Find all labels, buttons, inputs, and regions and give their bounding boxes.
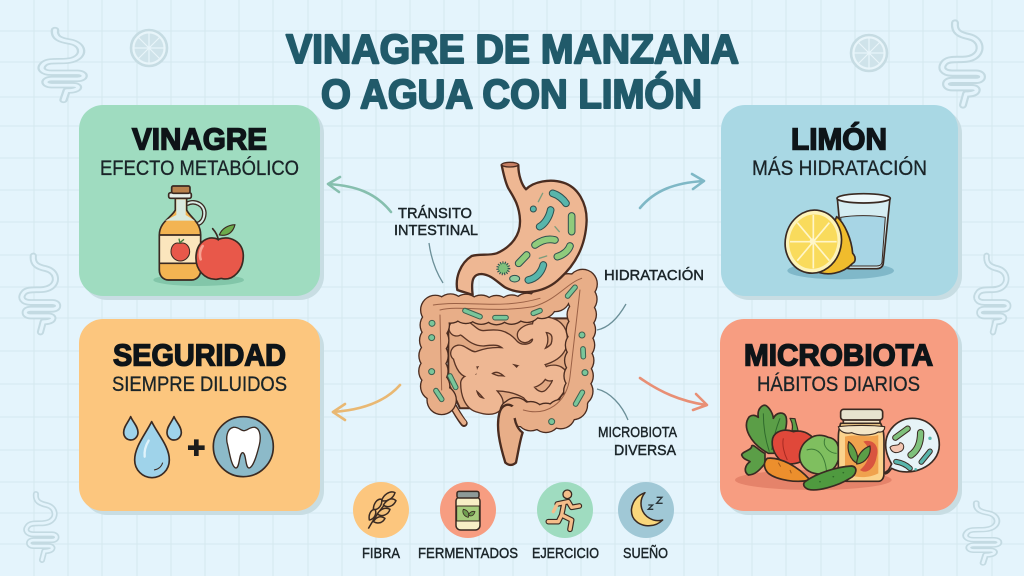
heading: microbiota: MICROBIOTA	[744, 338, 933, 372]
label: microbiota diversa	[598, 424, 677, 459]
background icon: gut left	[22, 256, 58, 332]
icon: jar	[456, 491, 480, 530]
small intestine	[448, 318, 570, 408]
subheading: efecto metabólico: EFECTO METABÓLICO	[100, 157, 299, 180]
background icon: gut bottom left	[26, 494, 56, 560]
habit: fibra	[353, 482, 409, 538]
background icon: gut bottom right	[966, 503, 999, 563]
background icon: gut top right	[942, 23, 982, 105]
arrow: to seguridad	[333, 385, 400, 420]
colon bacteria	[429, 287, 588, 425]
habit: fermentados	[440, 482, 496, 538]
background icon: lemon top right	[851, 35, 887, 71]
habit: sueño	[618, 482, 674, 538]
label: ejercicio: EJERCICIO	[532, 545, 599, 562]
icon: runner	[548, 490, 579, 529]
panel: vinagre	[79, 105, 324, 300]
leader lines	[429, 243, 628, 420]
subheading: más hidratación: MÁS HIDRATACIÓN	[752, 157, 927, 180]
panel: microbiota	[720, 319, 962, 515]
habit: ejercicio	[537, 482, 593, 538]
panel: seguridad	[79, 319, 324, 515]
heading: seguridad: SEGURIDAD	[113, 338, 286, 372]
icon: vinegar bottle and apple	[153, 186, 244, 286]
icon: lemon and glass of water	[779, 194, 894, 279]
subheading: siempre diluidos: SIEMPRE DILUIDOS	[112, 373, 287, 396]
arrow: to microbiota	[640, 378, 707, 410]
heading: limón: LIMÓN	[791, 120, 887, 156]
icon: water drops plus tooth	[124, 417, 273, 478]
title: O AGUA CON LIMÓN	[321, 71, 702, 117]
icon: wheat	[368, 492, 396, 529]
heading: vinagre: VINAGRE	[132, 122, 267, 156]
label: sueño: SUEÑO	[623, 545, 668, 562]
illustration: digestive system	[429, 162, 588, 465]
background icon: lemon top left	[131, 30, 167, 66]
title: VINAGRE DE MANZANA	[286, 26, 739, 72]
arrow: to vinagre	[328, 177, 391, 212]
large intestine	[433, 278, 583, 465]
background icon: stomach top left	[42, 30, 84, 100]
label: microbiota diversa: DIVERSA	[614, 442, 676, 459]
label: microbiota diversa: MICROBIOTA	[598, 424, 677, 441]
label: hidratación: HIDRATACIÓN	[604, 267, 704, 284]
panel: limón	[721, 105, 962, 300]
icon: moon and z	[632, 493, 663, 526]
subheading: hábitos diarios: HÁBITOS DIARIOS	[757, 373, 920, 396]
label: fermentados: FERMENTADOS	[418, 545, 518, 562]
label: tránsito intestinal: TRÁNSITO	[398, 205, 472, 222]
label: tránsito intestinal: INTESTINAL	[394, 222, 478, 239]
label: fibra: FIBRA	[362, 545, 400, 562]
stomach	[457, 162, 587, 295]
icon: vegetables, ferment jar and bacteria bubble	[735, 405, 939, 490]
arrow: to limón	[640, 174, 704, 208]
label: tránsito intestinal	[394, 205, 478, 239]
background icon: gut right	[976, 256, 1008, 332]
title	[286, 26, 739, 117]
